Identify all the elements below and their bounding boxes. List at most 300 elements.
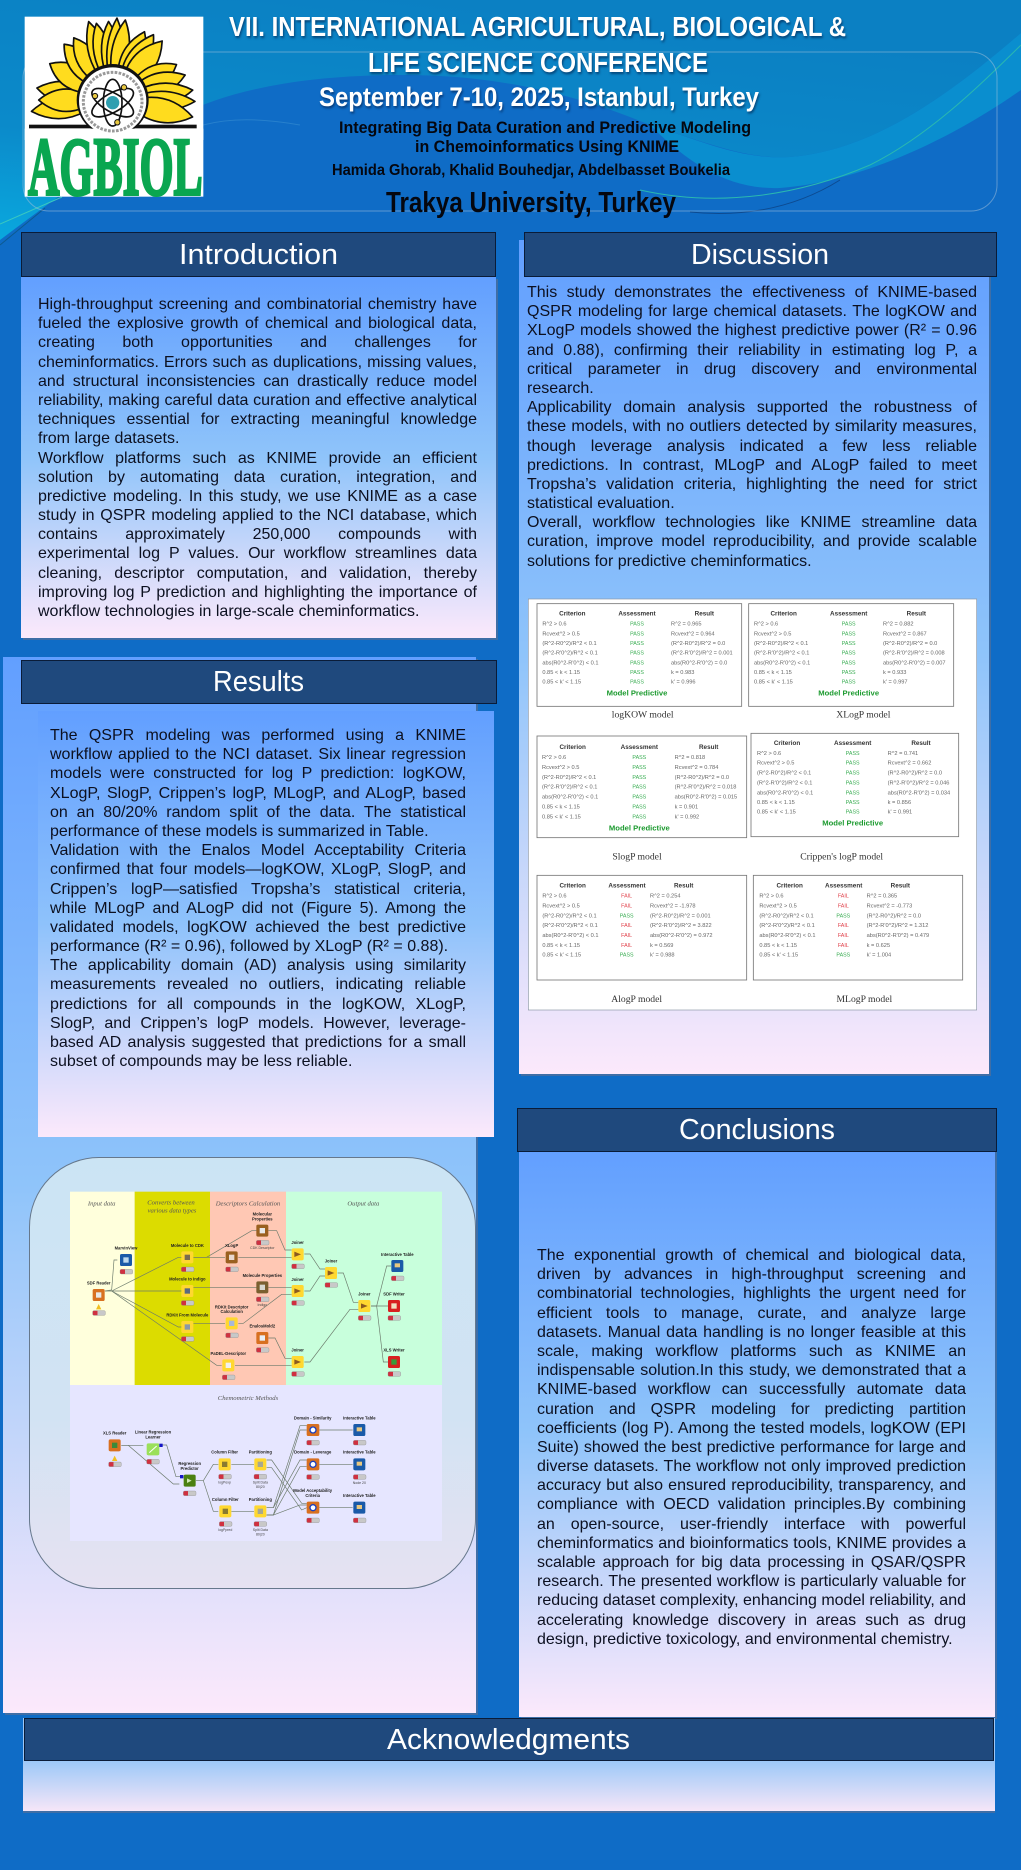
table: logKOW model — [537, 604, 742, 720]
table: XLogP model: PASS — [842, 670, 856, 676]
text: discussion body: statistical evaluation. — [527, 495, 675, 512]
table: Crippen's logP model: abs(R0^2-R'0^2) = 0.034 — [888, 790, 950, 796]
text: introduction body: experimental log P values. Our workflow streamlines data — [38, 545, 477, 562]
table: MLogP model: R^2 = 0.365 — [867, 893, 897, 899]
table: SlogP model: 0.85 < k < 1.15 — [542, 805, 580, 811]
table: MLogP model: (R^2-R0^2)/R^2 < 0.1 — [759, 913, 814, 919]
table: XLogP model: k' = 0.997 — [883, 680, 908, 686]
table: SlogP model: Rcvext^2 > 0.5 — [542, 765, 579, 771]
table: MLogP model: 0.85 < k' < 1.15 — [759, 953, 798, 959]
table: SlogP model: (R^2-R0^2)/R^2 = 0.0 — [675, 775, 729, 781]
table: XLogP model: (R^2-R0^2)/R^2 < 0.1 — [754, 641, 808, 647]
table: AlogP model: Criterion — [559, 883, 586, 890]
node: SDF Reader — [87, 1281, 111, 1315]
table: Crippen's logP model: PASS — [846, 800, 860, 806]
table: Crippen's logP model: Crippen's logP model — [800, 852, 883, 863]
logo: AGBIOL sunflower — [24, 16, 204, 213]
text: conclusions body — [537, 1247, 966, 1648]
table: SlogP model: R^2 > 0.6 — [542, 755, 566, 761]
panel: results text box — [38, 711, 494, 1137]
table: AlogP model: 0.85 < k' < 1.15 — [542, 953, 581, 959]
table: Crippen's logP model: PASS — [846, 780, 860, 786]
text: results body: XLogP, SlogP, Crippen’s logP, MLogP, and ALogP, based — [50, 785, 466, 802]
node: Molecular Properties: CDK Descriptor — [250, 1246, 275, 1250]
table: SlogP model: k' = 0.992 — [675, 815, 699, 821]
table: Crippen's logP model: Rcvext^2 > 0.5 — [757, 761, 794, 767]
node: PaDEL-Descriptor: PaDEL-Descriptor — [211, 1351, 246, 1356]
text: conclusions body: scalable approach for big data processing in QSAR/QSPR — [537, 1554, 966, 1571]
node: XLogP: XLogP — [225, 1243, 238, 1248]
figure: model acceptability tables — [528, 598, 977, 1010]
node: XLS Reader: XLS Reader — [103, 1431, 127, 1436]
table: SlogP model: Assessment — [621, 744, 659, 751]
heading: acknowledgments: Acknowledgments — [387, 1724, 630, 1756]
table: AlogP model: (R^2-R0^2)/R^2 < 0.1 — [542, 913, 597, 919]
table: XLogP model: PASS — [842, 621, 856, 627]
table: MLogP model: PASS — [836, 913, 851, 919]
table: SlogP model: SlogP model — [612, 852, 662, 863]
text: conclusions body: datasets. Manual data handling is no longer feasible at this — [537, 1324, 966, 1341]
text: conclusions body: diverse datasets. The workflow not only improved prediction — [537, 1458, 966, 1475]
table: AlogP model: R^2 = 0.254 — [650, 893, 680, 899]
table: SlogP model: (R^2-R'0^2)/R^2 < 0.1 — [542, 785, 597, 791]
table: MLogP model: abs(R0^2-R'0^2) = 0.479 — [867, 933, 929, 939]
table: Crippen's logP model: (R^2-R0^2)/R^2 = 0.0 — [888, 771, 942, 777]
conference title: September 7-10, 2025, Istanbul, Turkey — [319, 82, 759, 112]
text: introduction body: cleaning, descriptor computation, and validation, thereby — [38, 565, 477, 582]
table: SlogP model: PASS — [632, 785, 647, 791]
table: logKOW model: PASS — [630, 621, 644, 627]
table: SlogP model: 0.85 < k' < 1.15 — [542, 815, 581, 821]
text: conclusions body: KNIME-based workflow can successfully automate data — [537, 1381, 966, 1398]
table: Crippen's logP model: R^2 > 0.6 — [757, 751, 781, 757]
table: Crippen's logP model: k = 0.856 — [888, 800, 911, 806]
table: Crippen's logP model: PASS — [846, 751, 860, 757]
text: discussion body: XLogP models showed the highest predictive power (R² = 0.96 — [527, 322, 977, 339]
node: Joiner 5: Joiner — [358, 1292, 371, 1297]
heading: introduction: Introduction — [179, 239, 338, 271]
table: SlogP model: (R^2-R'0^2)/R^2 = 0.018 — [675, 785, 736, 791]
table: logKOW model: PASS — [630, 641, 644, 647]
text: discussion body: predictions. In contrast, MLogP and ALogP failed to meet — [527, 457, 977, 474]
workflow bands: Converts between — [147, 1200, 195, 1207]
background swoosh — [0, 0, 1021, 246]
node: Linear Regression Learner: Learner — [145, 1435, 161, 1440]
node: Domain - Similarity: Domain - Similarity — [294, 1415, 332, 1420]
table: MLogP model — [753, 875, 963, 1005]
table: XLogP model: 0.85 < k' < 1.15 — [754, 680, 793, 686]
node: EnalosMold2: EnalosMold2 — [250, 1323, 276, 1328]
text: introduction body: High-throughput screening and combinatorial chemistry have — [38, 296, 477, 313]
node: RDKit Descriptor Calculation: Calculation — [220, 1309, 243, 1314]
table: MLogP model: abs(R0^2-R'0^2) < 0.1 — [759, 933, 816, 939]
table: SlogP model: Model Predictive — [609, 824, 670, 833]
node: Interactive Table 2: Interactive Table — [343, 1450, 376, 1455]
table: MLogP model: Assessment — [825, 883, 863, 890]
table: MLogP model: (R^2-R'0^2)/R^2 < 0.1 — [759, 923, 815, 929]
text: results body: workflow applied to the NCI dataset. Six linear regression — [50, 746, 466, 763]
node: Regression Predictor: Predictor — [181, 1466, 199, 1471]
heading: discussion — [524, 232, 997, 277]
table: logKOW model: PASS — [630, 660, 644, 666]
table: XLogP model: k = 0.933 — [883, 670, 906, 676]
table: AlogP model — [537, 875, 747, 1005]
text: conclusions body: curation and QSPR modeling for predicting partition — [537, 1400, 966, 1418]
table: XLogP model: PASS — [842, 641, 856, 647]
text: introduction body — [38, 296, 478, 620]
table: AlogP model: 0.85 < k < 1.15 — [542, 943, 580, 949]
table: Crippen's logP model: (R^2-R'0^2)/R^2 < 0.1 — [757, 780, 812, 786]
conference title: LIFE SCIENCE CONFERENCE — [368, 47, 708, 78]
table: MLogP model: k = 0.625 — [867, 943, 890, 949]
text: results body: validated models, logKOW achieved the best predictive — [50, 919, 466, 936]
heading: results: Results — [213, 666, 304, 698]
table: AlogP model: (R^2-R'0^2)/R^2 = 3.822 — [650, 923, 712, 929]
text: discussion body: solutions for predictive cheminformatics. — [527, 553, 812, 570]
table: AlogP model: FAIL — [621, 903, 632, 909]
table: XLogP model: abs(R0^2-R'0^2) < 0.1 — [754, 660, 810, 666]
text: results body: performance of these models is summarized in Table. — [50, 823, 429, 840]
text: conclusions body: compliance with OECD validation principles.By combining — [537, 1496, 966, 1513]
table: MLogP model: FAIL — [838, 923, 849, 929]
text: discussion body: research. — [527, 380, 594, 397]
text: results body: The applicability domain (AD) analysis using similarity — [50, 957, 466, 974]
text: results body: Validation with the Enalos Model Acceptability Criteria — [50, 842, 466, 859]
panel: acknowledgments — [23, 1718, 995, 1811]
node: Joiner 3: Joiner — [291, 1348, 304, 1353]
text: discussion body: curation, improve model reproducibility, and provide scalable — [527, 533, 977, 550]
table: AlogP model: FAIL — [621, 923, 632, 929]
node: Interactive Table: Interactive Table — [381, 1252, 414, 1257]
poster title and authors: Hamida Ghorab, Khalid Bouhedjar, Abdelbasset Boukelia — [332, 162, 730, 179]
text: conclusions body: The exponential growth of chemical and biological data, — [537, 1247, 966, 1264]
workflow connections — [105, 1231, 391, 1515]
table: MLogP model: k' = 1.004 — [867, 953, 891, 959]
text: results body: Crippen’s logP—satisfied Tropsha’s statistical criteria, — [50, 880, 466, 898]
node: Joiner 4: Joiner — [325, 1259, 338, 1264]
text: conclusions body: reducing dataset complexity, enhancing model reliability, and — [537, 1592, 966, 1609]
table: MLogP model: FAIL — [838, 933, 849, 939]
table: XLogP model: Model Predictive — [818, 688, 879, 697]
table: logKOW model: R^2 > 0.6 — [542, 621, 567, 627]
table: SlogP model: PASS — [632, 765, 647, 771]
node: Model Acceptability Criteria: Criteria — [305, 1493, 321, 1498]
table: AlogP model: Result — [674, 883, 694, 890]
node: Regression Predictor: Regression — [178, 1461, 201, 1466]
workflow bands: various data types — [148, 1208, 197, 1215]
table: XLogP model: Assessment — [830, 611, 868, 618]
table: MLogP model: FAIL — [838, 903, 849, 909]
node: Linear Regression Learner: Linear Regression — [135, 1430, 172, 1435]
text: introduction body: study in QSPR modeling applied to the NCI database, which — [38, 507, 477, 524]
table: XLogP model: Result — [907, 611, 927, 618]
table: SlogP model: PASS — [632, 815, 647, 821]
node: Column Filter 2: logPpred — [218, 1528, 232, 1532]
table: AlogP model: PASS — [620, 913, 634, 919]
node: Joiner 2: Joiner — [291, 1277, 304, 1282]
table: SlogP model: R^2 = 0.818 — [675, 755, 705, 761]
text: results body: predictions for all compounds in the logKOW, XLogP, — [50, 996, 466, 1013]
node: Interactive Table — [381, 1252, 414, 1281]
table: XLogP model: abs(R0^2-R'0^2) = 0.007 — [883, 660, 946, 666]
text: discussion body: Applicability domain analysis supported the robustness of — [527, 399, 977, 416]
node: Interactive Table 2: Node 20 — [353, 1481, 366, 1485]
table: Crippen's logP model: PASS — [846, 771, 860, 777]
text: results body: models were constructed for log P prediction: logKOW, — [50, 765, 466, 782]
text: conclusions body: accuracy but also ensured reproducibility, transparency, and — [537, 1477, 966, 1494]
panel: introduction — [21, 277, 496, 638]
node: EnalosMold2 — [250, 1323, 276, 1352]
table: XLogP model: PASS — [842, 651, 856, 657]
node: Column Filter 1: Column Filter — [211, 1450, 238, 1455]
poster title and authors: Trakya University, Turkey — [386, 187, 676, 219]
table: logKOW model: R^2 = 0.965 — [671, 621, 702, 627]
node: Molecule Properties: Indigo — [258, 1303, 267, 1307]
text: discussion body: critical parameter in drug discovery and environmental — [527, 361, 977, 378]
table: Crippen's logP model: 0.85 < k < 1.15 — [757, 800, 795, 806]
text: results body: on an 80/20% random split of the data. The statistical — [50, 804, 466, 821]
node: Partitioning 1: Split Data — [253, 1481, 268, 1485]
text: results body: SlogP, and Crippen’s logP models. However, leverage- — [50, 1015, 466, 1032]
node: Partitioning 2 — [249, 1497, 272, 1536]
node: Molecule to CDK: Molecule to CDK — [171, 1243, 204, 1248]
text: discussion body: and 0.88), confirming their reliability in estimating log P, a — [527, 342, 977, 359]
table: AlogP model: k' = 0.988 — [650, 953, 675, 959]
table: MLogP model: (R^2-R0^2)/R^2 = 0.0 — [867, 913, 921, 919]
workflow bands: Descriptors Calculation — [215, 1200, 281, 1207]
text: introduction body: techniques essential for extracting meaningful knowledge — [38, 411, 477, 428]
table: Crippen's logP model: R^2 = 0.741 — [888, 751, 918, 757]
table: MLogP model: Result — [891, 883, 911, 890]
node: RDKit From Molecule — [166, 1313, 209, 1341]
table: XLogP model: PASS — [842, 680, 856, 686]
table: SlogP model: PASS — [632, 775, 647, 781]
table: logKOW model: PASS — [630, 670, 644, 676]
node: Regression Predictor — [178, 1461, 201, 1496]
text: conclusions body: scale, making workflow platforms such as KNIME an — [537, 1343, 966, 1360]
table: MLogP model: 0.85 < k < 1.15 — [759, 943, 797, 949]
node: Interactive Table 1: Interactive Table — [343, 1415, 376, 1420]
node: Interactive Table 3 — [343, 1493, 376, 1523]
title block — [229, 11, 848, 219]
table: logKOW model: PASS — [630, 651, 644, 657]
workflow bands — [70, 1192, 442, 1541]
text: introduction body: from large datasets. — [38, 430, 179, 447]
text: conclusions body: combinatorial technologies, highlights the urgent need for — [537, 1285, 966, 1302]
node: Partitioning 1 — [249, 1450, 272, 1489]
table: AlogP model: Rcvext^2 > 0.5 — [542, 903, 580, 909]
node: Column Filter 1: logPexp — [218, 1481, 231, 1485]
node: Linear Regression Learner — [135, 1430, 172, 1464]
text: introduction body: solution by automating data curation, integration, and — [38, 469, 477, 486]
table: logKOW model: Model Predictive — [607, 688, 667, 697]
table: MLogP model: (R^2-R'0^2)/R^2 = 1.312 — [867, 923, 928, 929]
text: results body: The QSPR modeling was performed using a KNIME — [50, 727, 466, 744]
node: Partitioning 1: Partitioning — [249, 1450, 272, 1455]
node: Domain - Leverage: Domain - Leverage — [294, 1450, 332, 1455]
node: XLS Writer: XLS Writer — [383, 1348, 405, 1353]
text: conclusions body: efficient tools to manage, curate, and analyze large — [537, 1305, 966, 1322]
node: Joiner 3 — [291, 1348, 304, 1376]
table: logKOW model: Criterion — [559, 611, 586, 618]
node: Joiner 1: Joiner — [291, 1240, 304, 1245]
node: Joiner 5 — [358, 1292, 371, 1320]
text: conclusions body: accelerating knowledge discovery in areas such as drug — [537, 1612, 966, 1629]
text: introduction body: fueled the explosive growth of chemical and biological data, — [38, 315, 477, 332]
table: XLogP model — [749, 604, 954, 720]
node: RDKit From Molecule: RDKit From Molecule — [166, 1313, 209, 1318]
table: MLogP model: FAIL — [838, 943, 849, 949]
node: Molecule to CDK — [171, 1243, 204, 1272]
table: AlogP model: R^2 > 0.6 — [542, 893, 567, 899]
node: XLogP — [225, 1243, 238, 1272]
table: MLogP model: R^2 > 0.6 — [759, 893, 784, 899]
table: MLogP model: Criterion — [776, 883, 803, 890]
node: Interactive Table 2 — [343, 1450, 376, 1485]
table: logKOW model: 0.85 < k' < 1.15 — [542, 680, 581, 686]
table: AlogP model: Rcvext^2 = -1.978 — [650, 903, 696, 909]
table: AlogP model: FAIL — [621, 933, 632, 939]
text: conclusions body: cheminformatics and bioinformatics tools, KNIME provides a — [537, 1535, 966, 1552]
table: AlogP model: k = 0.569 — [650, 943, 673, 949]
text: introduction body: predictive modeling. In this study, we use KNIME as a case — [38, 488, 477, 505]
text: conclusions body: design, predictive toxicology, and environmental chemistry. — [537, 1631, 953, 1648]
node: MarvinView: MarvinView — [115, 1245, 138, 1250]
panel: conclusions — [519, 1150, 995, 1717]
table: MLogP model: MLogP model — [836, 994, 893, 1005]
node: XLS Reader — [103, 1431, 127, 1467]
table: logKOW model: abs(R0^2-R'0^2) < 0.1 — [542, 660, 599, 666]
table: SlogP model: PASS — [632, 755, 647, 761]
panel: discussion — [519, 240, 989, 1074]
text: introduction body: workflow technologies in large-scale cheminformatics. — [38, 603, 420, 620]
table: MLogP model: Rcvext^2 = -0.773 — [867, 903, 912, 909]
table: AlogP model: AlogP model — [611, 994, 662, 1005]
heading: acknowledgments — [24, 1718, 994, 1761]
text: introduction body: cheminformatics. Errors such as duplications, missing values, — [38, 354, 477, 371]
poster title and authors: in Chemoinformatics Using KNIME — [415, 137, 679, 156]
workflow bands: Input data — [87, 1200, 116, 1207]
text: results body: based AD analysis suggested that predictions for a small — [50, 1034, 466, 1051]
text: results body — [50, 727, 466, 1070]
table: AlogP model: abs(R0^2-R'0^2) < 0.1 — [542, 933, 599, 939]
workflow bands: Output data — [347, 1200, 380, 1207]
table: XLogP model: PASS — [842, 660, 856, 666]
table: Crippen's logP model: Assessment — [834, 740, 872, 747]
text: results body: performance (R² = 0.96), followed by XLogP (R² = 0.88). — [50, 938, 448, 955]
figure: KNIME workflow — [70, 1192, 442, 1541]
text: results body: subset of compounds may be less reliable. — [50, 1053, 352, 1070]
node: RDKit Descriptor Calculation: RDKit Descriptor — [215, 1304, 249, 1309]
node: Molecular Properties: Properties — [252, 1216, 273, 1221]
table: logKOW model: Result — [695, 611, 715, 618]
node: PaDEL-Descriptor — [211, 1351, 246, 1380]
node: Model Acceptability Criteria — [293, 1488, 333, 1523]
table: SlogP model: PASS — [632, 805, 647, 811]
workflow bands: Chemometric Methods — [218, 1395, 279, 1402]
text: introduction body: improving log P prediction and highlighting the importance of — [38, 584, 477, 601]
table: MLogP model: PASS — [836, 953, 851, 959]
heading: results — [21, 660, 497, 704]
table: Crippen's logP model: (R^2-R0^2)/R^2 < 0.1 — [757, 771, 811, 777]
text: results body: confirmed that four models—logKOW, XLogP, SlogP, and — [50, 861, 466, 878]
table: SlogP model: PASS — [632, 795, 647, 801]
table: Crippen's logP model: PASS — [846, 790, 860, 796]
text: results body: while MLogP and ALogP did not (Figure 5). Among the — [50, 900, 466, 917]
table: Crippen's logP model: 0.85 < k' < 1.15 — [757, 810, 796, 816]
table: Crippen's logP model: abs(R0^2-R'0^2) < 0.1 — [757, 790, 813, 796]
text: conclusions body: coefficients (log P). Among the tested models, logKOW (EPI — [537, 1420, 966, 1437]
table: AlogP model: (R^2-R0^2)/R^2 = 0.001 — [650, 913, 711, 919]
text: discussion body: This study demonstrates the effectiveness of KNIME-based — [527, 284, 977, 301]
heading: introduction — [21, 232, 496, 277]
table: logKOW model: (R^2-R0^2)/R^2 = 0.0 — [671, 641, 725, 647]
text: discussion body — [527, 284, 978, 570]
table: logKOW model: k = 0.983 — [671, 670, 694, 676]
table: logKOW model: PASS — [630, 680, 644, 686]
node: Column Filter 2: Column Filter — [212, 1497, 239, 1502]
table: AlogP model: PASS — [620, 953, 634, 959]
table: AlogP model: (R^2-R'0^2)/R^2 < 0.1 — [542, 923, 598, 929]
table: MLogP model: FAIL — [838, 893, 849, 899]
table: logKOW model: Rcvext^2 = 0.964 — [671, 631, 715, 637]
heading: discussion: Discussion — [691, 239, 829, 271]
table: Crippen's logP model: PASS — [846, 810, 860, 816]
node: Molecular Properties: Molecular — [253, 1211, 272, 1216]
table: XLogP model: R^2 > 0.6 — [754, 621, 778, 627]
table: Crippen's logP model: Criterion — [774, 740, 800, 747]
text: conclusions body: research. The presented workflow is particularly valuable for — [537, 1573, 966, 1590]
table: XLogP model: (R^2-R0^2)/R^2 = 0.0 — [883, 641, 937, 647]
table: SlogP model: abs(R0^2-R'0^2) = 0.015 — [675, 795, 737, 801]
table: logKOW model: Assessment — [618, 611, 657, 618]
table: logKOW model: (R^2-R'0^2)/R^2 < 0.1 — [542, 651, 598, 657]
table: AlogP model: FAIL — [621, 943, 632, 949]
poster title and authors — [332, 118, 751, 219]
text: introduction body: creating both opportunities and challenges for — [38, 334, 477, 351]
table: XLogP model: Rcvext^2 = 0.867 — [883, 631, 927, 637]
table: SlogP model: Rcvext^2 = 0.784 — [675, 765, 718, 771]
node: Interactive Table 3: Interactive Table — [343, 1493, 376, 1498]
table: logKOW model: PASS — [630, 631, 644, 637]
table: Crippen's logP model: Result — [911, 740, 932, 747]
node: Molecule Properties: Molecule Properties — [243, 1273, 283, 1278]
table: AlogP model: abs(R0^2-R'0^2) = 0.972 — [650, 933, 713, 939]
panel: workflow figure frame — [29, 1157, 476, 1589]
table: logKOW model: abs(R0^2-R'0^2) = 0.0 — [671, 660, 727, 666]
table: XLogP model: Rcvext^2 > 0.5 — [754, 631, 791, 637]
text: introduction body: Workflow platforms such as KNIME provide an efficient — [38, 450, 477, 466]
node: Column Filter 2 — [212, 1497, 239, 1532]
heading: conclusions: Conclusions — [679, 1114, 835, 1146]
node: Partitioning 1: 80|20 — [256, 1485, 265, 1489]
panel: results outer — [3, 657, 476, 1713]
node: Domain - Leverage — [294, 1450, 332, 1479]
table: Crippen's logP model: (R^2-R'0^2)/R^2 = 0.046 — [888, 780, 949, 786]
table: logKOW model: 0.85 < k < 1.15 — [542, 670, 580, 676]
text: introduction body: contains approximately 250,000 compounds with — [38, 526, 477, 543]
text: conclusions body: Suite) showed the best predictive performance for large and — [537, 1439, 966, 1456]
node: Molecule to Indigo — [169, 1277, 206, 1305]
node: Joiner 2 — [291, 1277, 304, 1305]
node: SDF Writer — [383, 1292, 405, 1320]
table: logKOW model: k' = 0.996 — [671, 680, 696, 686]
node: Molecule to Indigo: Molecule to Indigo — [169, 1277, 206, 1282]
table: AlogP model: Assessment — [608, 883, 647, 890]
node: SDF Writer: SDF Writer — [383, 1292, 405, 1297]
table: SlogP model — [537, 736, 747, 863]
table: logKOW model: logKOW model — [612, 709, 674, 720]
